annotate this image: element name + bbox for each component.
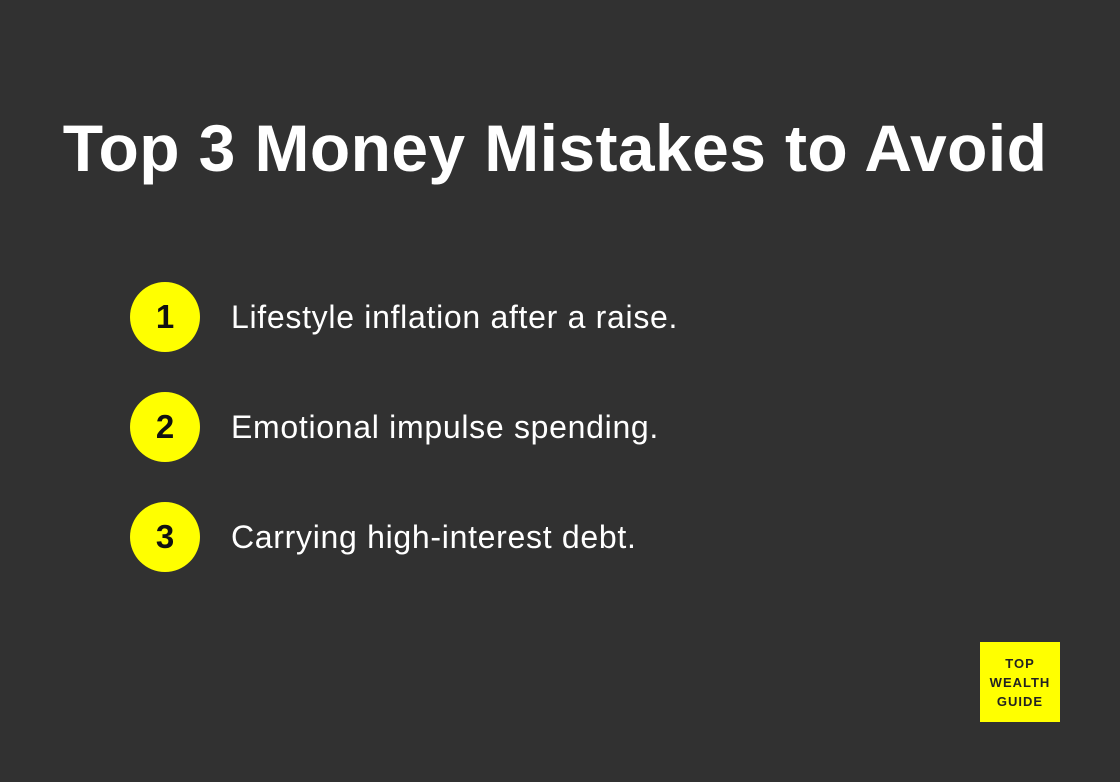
logo: WEALTH [990, 674, 1050, 690]
logo: GUIDE [997, 694, 1043, 708]
icon: number 1 [130, 282, 200, 352]
icon: number 2: 2 [156, 408, 174, 445]
icon: number 3: 3 [156, 518, 174, 555]
item 3 [130, 502, 637, 572]
logo [980, 642, 1060, 722]
item 2 [130, 392, 659, 462]
text: item 2: Emotional impulse spending. [231, 409, 659, 445]
logo: TOP [1005, 656, 1035, 670]
icon: number 3 [130, 502, 200, 572]
title: Top 3 Money Mistakes to Avoid [63, 111, 1047, 185]
text: item 3: Carrying high-interest debt. [231, 519, 637, 555]
item 1 [130, 282, 678, 352]
icon: number 2 [130, 392, 200, 462]
icon: number 1: 1 [156, 298, 174, 335]
text: item 1: Lifestyle inflation after a raise. [231, 299, 678, 335]
